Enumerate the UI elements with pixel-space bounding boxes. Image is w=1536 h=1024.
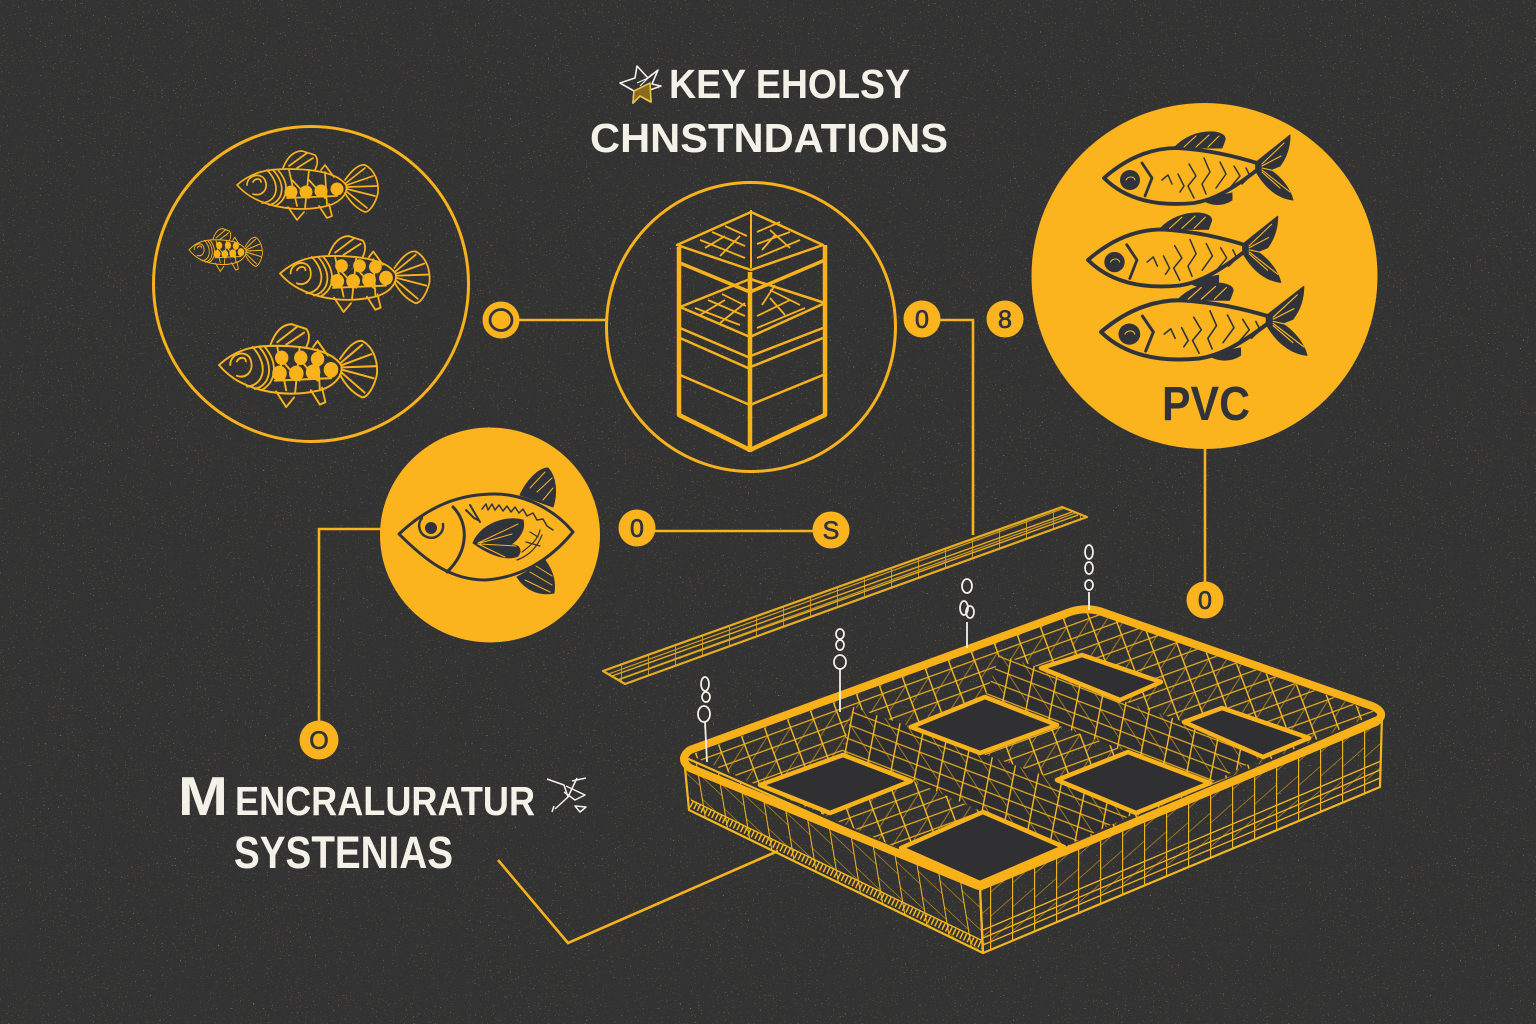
badge 4: 0	[1198, 587, 1212, 615]
floor windows	[760, 655, 1309, 883]
badge 3: 8	[998, 306, 1012, 334]
icon: fish middle	[1088, 213, 1281, 287]
icon: title star	[620, 66, 661, 103]
title	[590, 61, 948, 161]
marker 4	[1085, 545, 1093, 610]
connector lines	[319, 320, 1205, 943]
icon: scribble ornament	[547, 778, 586, 812]
white chain markers	[698, 545, 1093, 762]
title line 2: CHNSTNDATIONS	[590, 115, 948, 161]
icon: fish small	[189, 229, 262, 271]
tray interior mesh	[690, 610, 1378, 885]
label initial: M	[178, 765, 228, 827]
PVC label: PVC	[1162, 378, 1250, 431]
panel: three fish PVC circle	[1032, 103, 1378, 449]
badge 5: 0	[630, 515, 644, 543]
divider strip one	[842, 707, 1136, 847]
icon: fish bottom	[1101, 283, 1307, 360]
bottom label	[178, 765, 586, 878]
icon: large fish	[399, 468, 573, 594]
badge 4	[1186, 582, 1224, 618]
badge 3	[986, 300, 1024, 338]
label line 1: ENCRALURATUR	[235, 778, 535, 824]
badge 6	[812, 512, 850, 548]
divider strip two mesh	[985, 655, 1263, 783]
ruler strip	[603, 507, 1087, 684]
title line 1: KEY EHOLSY	[669, 61, 910, 107]
tray outer right wall	[980, 715, 1382, 953]
icon: fish middle	[280, 236, 430, 312]
tray rim	[684, 609, 1381, 886]
tray outer left wall	[684, 757, 983, 953]
badge 5	[618, 510, 656, 546]
badge 2: 0	[915, 306, 929, 334]
mesh tray	[684, 609, 1382, 953]
panel: layered tower circle	[606, 182, 896, 472]
marker 3	[960, 579, 974, 648]
divider strip two	[985, 655, 1263, 783]
panel: single fish circle	[380, 428, 600, 642]
badge 7	[300, 720, 338, 760]
badge 7: O	[309, 727, 329, 755]
connector badges	[300, 300, 1224, 760]
badge 6: S	[823, 517, 839, 545]
icon: fish top	[237, 151, 378, 220]
badge 1	[482, 302, 520, 338]
marker 1	[698, 677, 710, 762]
panel: four spotted fish circle	[154, 126, 468, 442]
icon: layered tower	[677, 210, 825, 452]
divider strip one mesh	[842, 707, 1136, 847]
icon: fish top	[1104, 132, 1293, 204]
marker 2	[834, 629, 846, 712]
icon: fish bottom	[219, 324, 377, 407]
badge 2	[904, 300, 940, 338]
tray base bands	[691, 761, 1381, 946]
label line 2: SYSTENIAS	[234, 827, 453, 878]
